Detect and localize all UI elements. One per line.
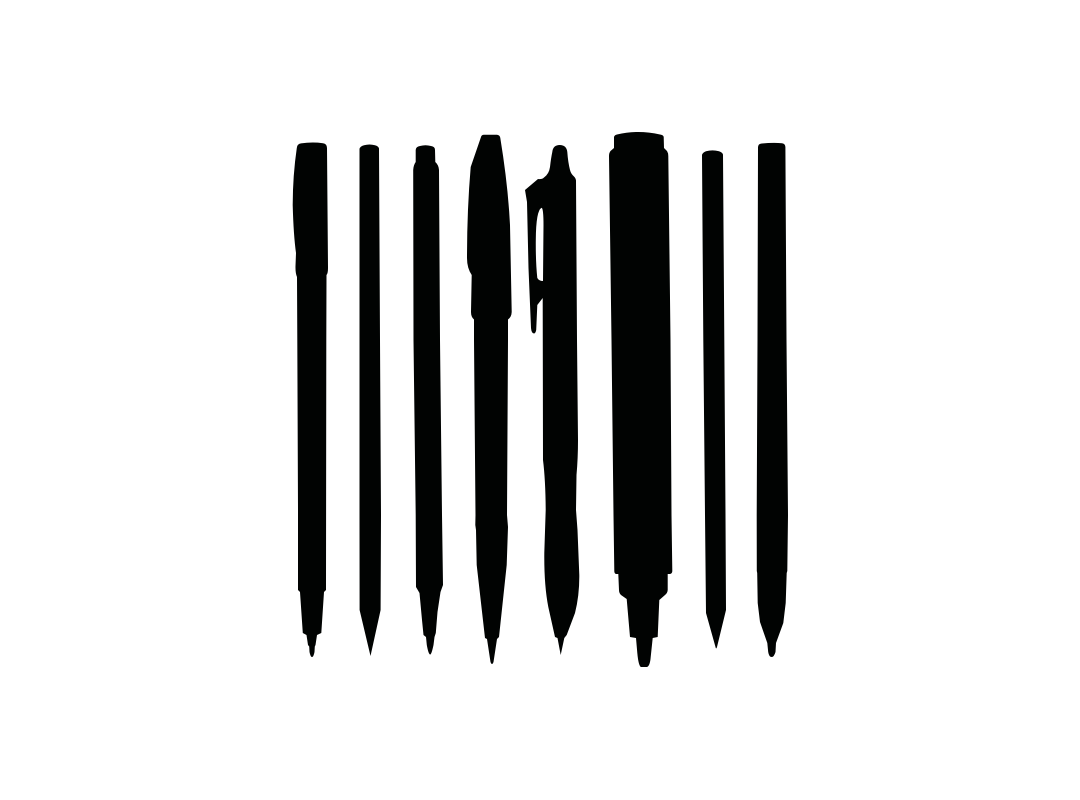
icon: slim pencil 7 (702, 150, 726, 648)
icon: slim pencil 2 (360, 144, 381, 656)
icon: thick marker 6 (609, 132, 672, 667)
icon: click pen 3 (413, 145, 443, 654)
icon: capped pen 1 (293, 143, 328, 657)
icon: retractable pen 5 with clip (525, 145, 579, 655)
icon: capped felt pen 4 (467, 135, 512, 664)
icon: tapered pen 8 (757, 143, 788, 657)
